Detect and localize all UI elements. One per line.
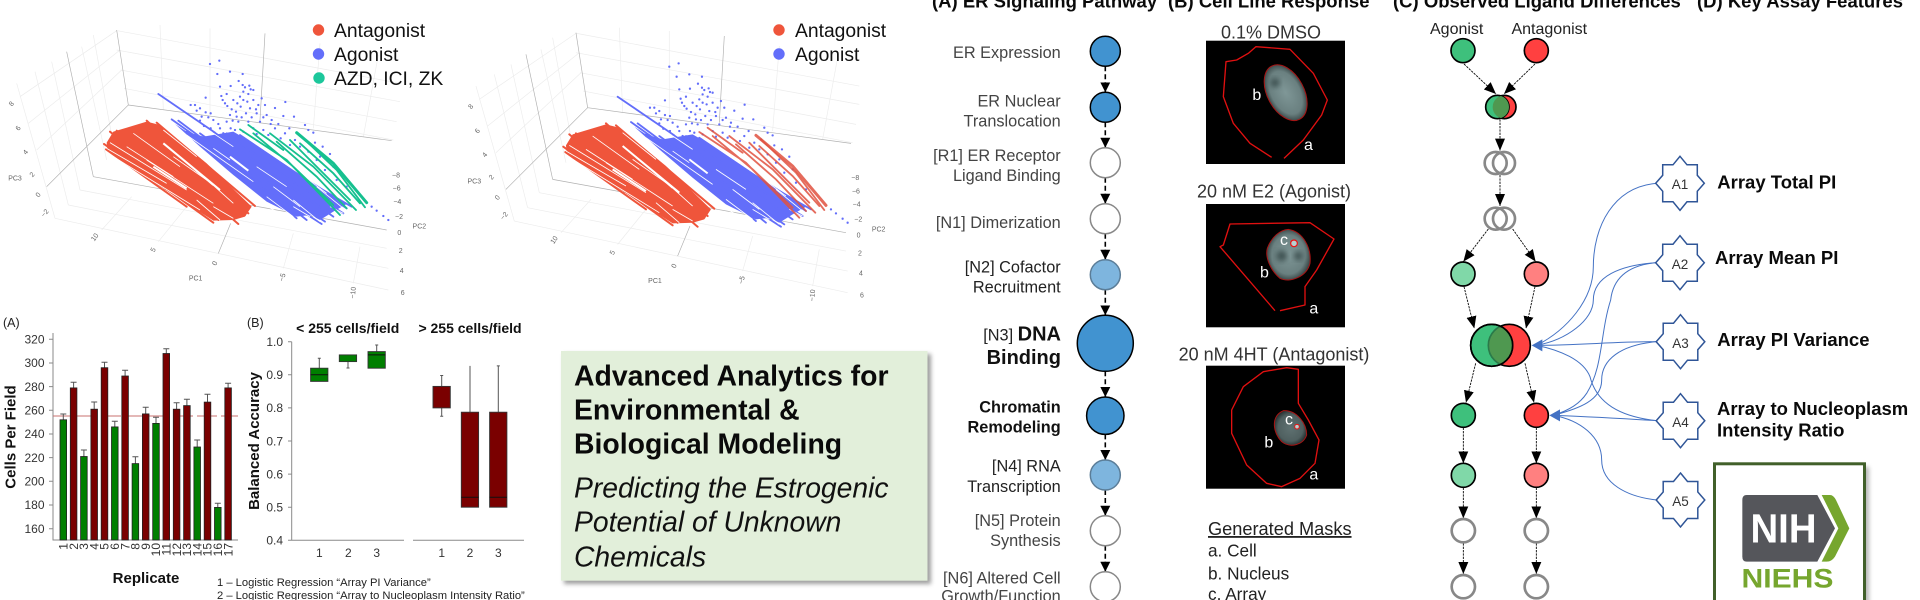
pathway labels: [N1] Dimerization (936, 214, 1061, 232)
panel B: box plot of balanced accuracy: < 255 cells/field (296, 320, 399, 336)
pathway labels: Chromatin (979, 399, 1061, 417)
scatter plot points and axes: 8 (8, 100, 16, 108)
panel B: box plot of balanced accuracy: 0.9 (266, 368, 283, 382)
panel: cell line microscopy response: 20 nM E2 (Agonist) (1197, 182, 1351, 202)
generated masks list: b. Nucleus (1208, 563, 1289, 583)
subtitle text: Predicting the Estrogenic (574, 471, 889, 503)
legend: two classes (773, 21, 887, 66)
panel B: box plot of balanced accuracy: 0.4 (266, 534, 283, 548)
panel A: bar chart of cells per field: 14 (190, 543, 204, 556)
logo: NIH NIEHS (1714, 464, 1869, 600)
panel B: box plot of balanced accuracy: 2 (467, 546, 474, 560)
panel B: box plot of balanced accuracy: Balanced Accuracy (246, 371, 263, 510)
panel: ER signaling pathway (933, 36, 1133, 600)
scatter plot points and axes: 4 (400, 268, 404, 275)
pathway labels: [N5] Protein (975, 512, 1061, 530)
panel: cell line microscopy response: 20 nM 4HT (Antagonist) (1179, 345, 1369, 365)
panel A: bar chart of cells per field: 160 (24, 522, 45, 536)
pathway labels: [N2] Cofactor (965, 259, 1061, 277)
legend: three classes: Agonist (334, 45, 399, 66)
pathway labels (933, 44, 1061, 600)
panel: cell line microscopy response: 0.1% DMSO (1221, 23, 1321, 43)
scatter plot points and axes: 5 (150, 247, 158, 254)
panel: 3D PCA scatter with two classes: 5 (609, 249, 617, 256)
scatter plot points and axes: −10 (350, 286, 358, 299)
panel B: box plot of balanced accuracy: (B) (247, 316, 264, 330)
scatter plot points and axes: −4 (393, 199, 401, 206)
feature A3 (1656, 315, 1870, 369)
panel: observed ligand differences network: Antagonist (1511, 21, 1588, 38)
feature A1 (1656, 156, 1836, 210)
panel A: bar chart of cells per field: 10 (149, 543, 163, 556)
panel: 3D PCA scatter with two classes: −2 (499, 211, 510, 222)
panel: 3D PCA scatter with two classes: 0 (671, 263, 679, 269)
title text: Environmental & (574, 394, 800, 426)
panel B: box plot of balanced accuracy: 1 (438, 546, 445, 560)
panel: 3D PCA scatter with two classes: 6 (474, 128, 482, 135)
panel A: bar chart of cells per field: 3 (77, 543, 91, 550)
pathway labels: Recruitment (973, 279, 1061, 297)
cell images overlays: b (1260, 264, 1269, 281)
subtitle text: Chemicals (574, 541, 706, 573)
panel A: bar chart of cells per field: 12 (170, 543, 184, 556)
scatter plot points and axes: −6 (393, 186, 401, 193)
network nodes and arrows (1451, 39, 1548, 598)
panel: 3D PCA scatter with two classes: 10 (550, 235, 560, 246)
panel: 3D PCA scatter with two classes: PC3 (468, 178, 481, 185)
panel: 3D PCA scatter with two classes: 0 (494, 194, 502, 202)
legend: two classes: Antagonist (795, 21, 887, 42)
panel A: bar chart of cells per field: Cells Per Field (2, 385, 20, 489)
scatter plot points and axes: 6 (401, 290, 405, 297)
panel: observed ligand differences network: Agonist (1430, 21, 1484, 38)
panel: 3D PCA scatter with two classes: −5 (738, 275, 747, 285)
panel A: bar chart of cells per field: 260 (24, 404, 45, 418)
panel A: bar chart of cells per field: 4 (87, 543, 101, 550)
panel A: bar chart of cells per field: 17 (221, 543, 235, 556)
panel: 3D PCA scatter with two classes: −6 (852, 188, 860, 195)
panel A: bar chart of cells per field: Replicate (113, 570, 179, 587)
legend: three classes (313, 21, 443, 90)
scatter plot points and axes: PC3 (8, 176, 22, 183)
panel: 3D PCA scatter with two classes: −2 (854, 217, 862, 224)
panel B: box plot of balanced accuracy: 3 (495, 546, 502, 560)
cell images overlays: c (1280, 232, 1288, 249)
panel A: bar chart of cells per field: 200 (24, 474, 45, 488)
pathway labels: Transcription (967, 478, 1061, 496)
panel A: bar chart of cells per field: (A) (3, 316, 20, 330)
cell images overlays (1220, 47, 1334, 317)
scatter plot points and axes (8, 25, 426, 299)
panel: 3D PCA scatter with two classes: 4 (859, 271, 863, 278)
panel A: bar chart of cells per field: 2 (67, 543, 81, 550)
generated masks list: a. Cell (1208, 541, 1257, 561)
cell images overlays: a (1309, 300, 1318, 317)
pathway labels: ER Expression (953, 44, 1061, 62)
title text: Advanced Analytics for (574, 361, 888, 393)
feature A4 (1656, 394, 1908, 448)
panel: 3D PCA scatter with two classes: −10 (809, 289, 817, 302)
scatter plot points and axes: 10 (90, 232, 101, 243)
feature A2 (1656, 236, 1838, 290)
panel: 3D PCA scatter with two classes: PC2 (872, 226, 886, 233)
legend: two classes: Agonist (795, 45, 860, 66)
panel A: bar chart of cells per field: 13 (180, 543, 194, 556)
panel A: bar chart of cells per field: 11 (160, 543, 174, 555)
panel: 3D PCA scatter with two classes: 8 (467, 103, 475, 111)
panel B: box plot of balanced accuracy: 1.0 (266, 335, 283, 349)
generated masks list: Generated Masks (1208, 519, 1352, 539)
logo: NIH NIEHS: NIH (1750, 506, 1816, 552)
panel A: bar chart of cells per field: 6 (108, 543, 122, 550)
panel: 3D PCA scatter with two classes: 6 (860, 293, 864, 300)
panel: cell line microscopy response: b (1264, 435, 1273, 452)
scatter plot points and axes: 4 (22, 149, 30, 156)
pathway labels: [N3] DNA (983, 324, 1061, 346)
panel B: box plot of balanced accuracy: > 255 cells/field (418, 320, 522, 336)
pathway labels: [R1] ER Receptor (933, 147, 1061, 165)
figure note: model legend: 1 – Logistic Regression “Array PI Variance” (217, 577, 431, 589)
scatter plot points and axes: PC2 (413, 224, 426, 231)
logo: NIH NIEHS: NIEHS (1742, 563, 1834, 593)
panel A: bar chart of cells per field: 1 (56, 543, 70, 550)
subtitle text: Potential of Unknown (574, 506, 841, 538)
scatter plot points and axes: 2 (29, 171, 37, 179)
panel: 3D PCA scatter with three classes (8, 25, 426, 299)
panel: cell line microscopy response (1179, 23, 1369, 600)
panel B: box plot of balanced accuracy: 0.6 (266, 467, 283, 481)
pathway labels: Binding (987, 347, 1061, 369)
panel: 3D PCA scatter with two classes: −4 (853, 202, 861, 209)
feature A3: Array PI Variance (1717, 329, 1870, 350)
scatter plot points and axes: −8 (392, 172, 400, 179)
scatter plot points and axes: PC1 (189, 275, 203, 282)
panel A: bar chart of cells per field: 240 (24, 427, 45, 441)
pathway labels: ER Nuclear (977, 93, 1061, 111)
pathway arrows (1104, 66, 1106, 572)
panel: 3D PCA scatter with two classes: −8 (851, 175, 859, 182)
feature A1: A1 (1672, 177, 1688, 192)
panel A: bar chart of cells per field: 8 (129, 543, 143, 550)
panel: 3D PCA scatter with two classes: 0 (857, 233, 861, 240)
panel A: bar chart of cells per field: 9 (139, 543, 153, 550)
panel A: bar chart of cells per field: 280 (24, 380, 45, 394)
blue feature connectors (1532, 183, 1657, 500)
pathway labels: Remodeling (968, 419, 1061, 437)
scatter plot points and axes: 0 (397, 230, 401, 237)
panel: cell line microscopy response: c (1285, 412, 1293, 429)
title panel (561, 351, 931, 584)
panel B: box plot of balanced accuracy: 1 (316, 546, 323, 560)
panel B: box plot of balanced accuracy: 3 (373, 546, 380, 560)
figure note: model legend (217, 577, 525, 600)
feature A2: A2 (1672, 257, 1688, 272)
panel: 3D PCA scatter with two classes (467, 28, 886, 302)
legend: three classes: AZD, ICI, ZK (334, 69, 443, 90)
panel: observed ligand differences network (1430, 21, 1657, 598)
panel A: bar chart of cells per field (2, 316, 238, 587)
feature A3: A3 (1672, 336, 1689, 351)
panel B: box plot of balanced accuracy (246, 316, 524, 560)
scatter plot points and axes: 0 (211, 260, 219, 267)
panel: 3D PCA scatter with two classes: 2 (858, 251, 862, 258)
panel A: bar chart of cells per field: 320 (24, 332, 45, 346)
pathway labels: Synthesis (990, 532, 1061, 550)
feature A4: A4 (1672, 415, 1689, 430)
scatter plot points and axes: 2 (399, 248, 403, 255)
cell images overlays: a (1304, 137, 1313, 154)
generated masks list (1208, 519, 1352, 600)
legend: three classes: Antagonist (334, 21, 426, 42)
feature A5: A5 (1672, 494, 1689, 509)
panel A: bar chart of cells per field: 5 (98, 543, 112, 550)
pathway labels: [N6] Altered Cell (943, 569, 1061, 587)
panel A: bar chart of cells per field: 300 (24, 356, 45, 370)
pathway labels: Translocation (964, 113, 1061, 131)
panel A: bar chart of cells per field: 7 (118, 543, 132, 550)
title text: Biological Modeling (574, 428, 842, 460)
panel A: bar chart of cells per field: 220 (24, 451, 45, 465)
panel B: box plot of balanced accuracy: 0.5 (266, 500, 283, 514)
pathway labels: [N4] RNA (992, 458, 1061, 476)
scatter plot points and axes: 0 (35, 191, 43, 199)
panel A: bar chart of cells per field: 15 (201, 543, 215, 556)
feature A1: Array Total PI (1717, 171, 1836, 192)
feature A4: Intensity Ratio (1717, 420, 1844, 441)
section headings (932, 0, 1903, 12)
scatter plot points and axes: −2 (40, 208, 51, 219)
panel B: box plot of balanced accuracy: 2 (345, 546, 352, 560)
panel: 3D PCA scatter with two classes: 4 (481, 152, 489, 159)
panel B: box plot of balanced accuracy: 0.8 (266, 401, 283, 415)
feature A4: Array to Nucleoplasm (1717, 398, 1908, 419)
cell images overlays: b (1252, 87, 1261, 104)
panel: 3D PCA scatter with two classes: PC1 (648, 278, 662, 285)
panel: 3D PCA scatter with two classes: 2 (488, 174, 496, 181)
feature A2: Array Mean PI (1715, 247, 1838, 268)
feature A5 (1656, 473, 1705, 527)
pathway nodes (1077, 36, 1133, 600)
scatter plot points and axes: −2 (395, 214, 403, 221)
scatter plot points and axes: 6 (15, 125, 23, 132)
scatter plot points and axes: −5 (279, 273, 288, 282)
panel A: bar chart of cells per field: 16 (211, 543, 225, 556)
panel A: bar chart of cells per field: 180 (24, 498, 45, 512)
pathway labels: Ligand Binding (953, 167, 1061, 185)
panel B: box plot of balanced accuracy: 0.7 (266, 434, 283, 448)
panel: key assay features (1656, 156, 1908, 527)
panel: cell line microscopy response: a (1309, 466, 1318, 483)
